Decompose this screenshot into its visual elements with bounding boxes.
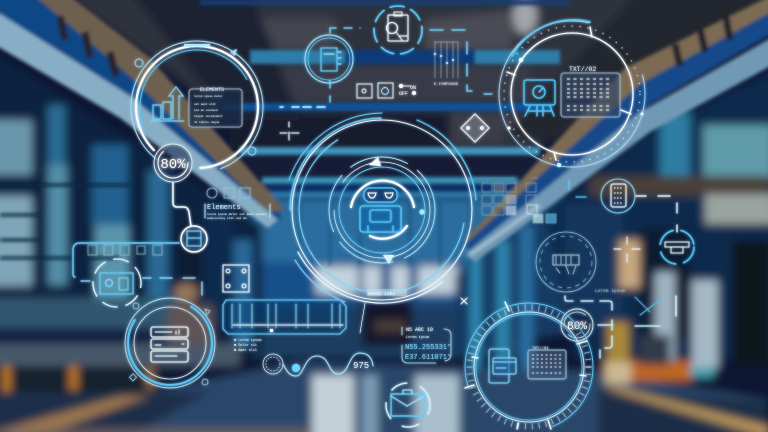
panel: small grid: [474, 178, 556, 223]
ring: payment dial: [447, 285, 611, 432]
line under central ring: [360, 303, 365, 333]
switch: on off: [399, 84, 416, 97]
dashed link left: [280, 106, 325, 108]
dashed ring: safe: [85, 251, 149, 315]
ring: growth chart: [105, 15, 289, 199]
panel: elements text: [189, 87, 242, 127]
wave gauge: 975: [353, 361, 369, 371]
panel: coordinates: N55.255331°: [405, 343, 451, 352]
panel: code strip under central ring: 00101 1101: [368, 291, 395, 297]
central ring system with robot: [286, 113, 478, 306]
panel: data table: TXT//02: [569, 66, 596, 73]
panel: data table: [561, 66, 620, 117]
bracket right: [565, 296, 660, 358]
panel: wide bars: ■ Lorem ipsum: [234, 338, 261, 343]
panel: coordinates: E37.611071°: [405, 353, 451, 362]
icon: presentation: [524, 80, 555, 116]
badge: 80 percent right: [561, 309, 593, 341]
HUD overlay: [73, 5, 694, 432]
ring: workshop icon: [536, 232, 596, 292]
dashed: under grid: [569, 180, 586, 197]
panel: elements text: ELEMENTS: [200, 87, 224, 93]
switch: on off: OFF: [399, 91, 408, 97]
text: elements block: Elements: [207, 204, 241, 212]
marker x: [461, 298, 467, 304]
icons row: elements: [207, 188, 250, 198]
panel: wide bars: ■ Dolor sit: [234, 343, 257, 348]
connector: badge to small ring: [173, 183, 191, 226]
sharper beams and railings: [0, 0, 768, 265]
panel: wide bars: ■ Amet elit: [234, 348, 257, 353]
panel: icon bracket left: [73, 243, 202, 295]
line: right arrow: [635, 297, 660, 315]
panel: calendar table: TXT//01: [532, 346, 549, 351]
small faded text: Lorem ipsum: [595, 288, 625, 294]
dashed ring: scanner: [660, 230, 694, 264]
badge: 80 percent top left: 80%: [160, 157, 186, 173]
panel: elements text: sit amet elit: [194, 102, 216, 106]
icon: robot: [360, 188, 401, 232]
badge: 80 percent top left: [154, 144, 192, 182]
dashed ring: clipboard: [374, 6, 422, 54]
icon: diamond: [461, 114, 489, 142]
ring: small folder node: [181, 226, 207, 252]
icons: squares: [357, 83, 393, 98]
crosshair right: [614, 237, 640, 262]
icon: bars and arrow: [151, 87, 184, 121]
panel: sliders: E.FORFOURS: [434, 83, 459, 87]
panel: elements text: ut labore magna: [194, 120, 219, 124]
badge: 80 percent right: 80%: [567, 321, 587, 333]
text: elements block: adipiscing elit sed do: [207, 216, 247, 220]
ring: notebook: [305, 35, 353, 83]
icon: server stack: [151, 327, 188, 362]
text: elements block: [205, 204, 270, 220]
panel: calendar table: [528, 346, 566, 379]
dashed connectors top: [330, 28, 492, 102]
panel: code strip under central ring: [367, 289, 407, 297]
ring: calculator: [601, 179, 635, 213]
panel: coordinates: [402, 327, 451, 363]
icon: phone card: [489, 349, 516, 383]
panel: elements text: tempor incididunt: [194, 114, 223, 118]
ring: presentation board with table: [483, 5, 661, 183]
panel: elements text: sed do eiusmod: [194, 108, 218, 112]
dashed ring: briefcase: [380, 377, 436, 432]
server ring: [113, 286, 227, 400]
panel: coordinates: Lorem ipsum: [406, 335, 429, 340]
panel: elements text: lorem ipsum dolor: [194, 94, 223, 98]
panel: wide bars: [223, 300, 346, 353]
panel: sliders: [434, 42, 459, 87]
text: elements block: lorem ipsum dolor sit amet consec: [207, 212, 267, 216]
switch: on off: ON: [410, 85, 416, 91]
square with four holes: [223, 265, 249, 292]
dashed connectors right: [636, 196, 677, 316]
panel: coordinates: N5 ARC 10: [406, 327, 433, 333]
crosshair: [280, 122, 299, 140]
wave gauge: [263, 353, 373, 376]
